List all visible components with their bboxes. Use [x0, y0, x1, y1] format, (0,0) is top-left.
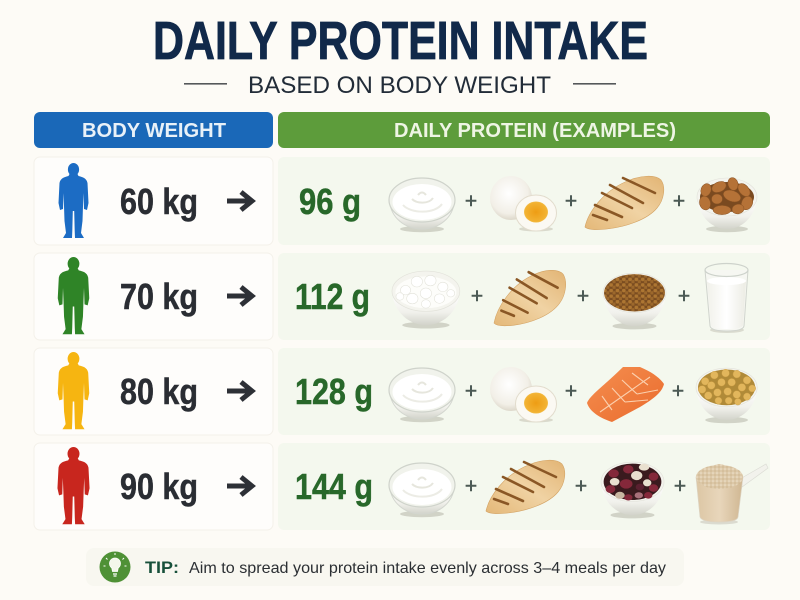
- body weight card 90 kg: 90 kg: [120, 466, 198, 507]
- protein card 128 g: [278, 348, 770, 435]
- protein card 144 g: +: [674, 475, 686, 498]
- row: 90 kg: [34, 443, 770, 530]
- icon: almonds: [697, 176, 757, 232]
- body weight card 80 kg: 80 kg: [120, 371, 198, 412]
- protein card 128 g: 128 g: [295, 371, 373, 412]
- icon: mixed beans: [601, 462, 664, 518]
- tip bar: [86, 548, 684, 586]
- icon: glass of milk: [705, 264, 748, 333]
- icon: protein powder scoop: [696, 464, 768, 524]
- body weight card 60 kg: 60 kg: [120, 181, 198, 222]
- body weight card 90 kg: [34, 443, 273, 530]
- header: daily protein: DAILY PROTEIN (EXAMPLES): [394, 119, 676, 142]
- title: DAILY PROTEIN INTAKE: [153, 11, 648, 71]
- body weight card 60 kg: [34, 157, 273, 245]
- protein card 96 g: +: [673, 190, 685, 213]
- protein card 112 g: +: [678, 285, 690, 308]
- icon: chickpeas: [696, 368, 757, 423]
- header: daily protein: [278, 112, 770, 148]
- body weight card 70 kg: 70 kg: [120, 276, 198, 317]
- row: 80 kg: [34, 348, 770, 435]
- protein card 144 g: +: [465, 475, 477, 498]
- protein card 96 g: 96 g: [299, 181, 361, 222]
- protein card 96 g: [278, 157, 770, 245]
- icon: light bulb: [100, 552, 130, 582]
- protein card 112 g: [278, 253, 770, 340]
- protein card 112 g: 112 g: [295, 276, 370, 317]
- body weight card 70 kg: [34, 253, 273, 340]
- header: body weight: [34, 112, 273, 148]
- protein card 128 g: +: [672, 380, 684, 403]
- icon: cottage cheese: [392, 271, 460, 329]
- header: body weight: BODY WEIGHT: [82, 119, 226, 142]
- tip label: TIP:: [145, 558, 179, 577]
- protein card 144 g: +: [575, 475, 587, 498]
- protein card 144 g: 144 g: [295, 466, 373, 507]
- row: 60 kg: [34, 157, 770, 245]
- subtitle: BASED ON BODY WEIGHT: [248, 72, 551, 99]
- protein card 96 g: +: [465, 190, 477, 213]
- protein card 112 g: +: [577, 285, 589, 308]
- protein card 128 g: +: [565, 380, 577, 403]
- icon: salmon: [587, 367, 664, 422]
- protein card 96 g: +: [565, 190, 577, 213]
- protein card 144 g: [278, 443, 770, 530]
- protein card 128 g: +: [465, 380, 477, 403]
- protein card 112 g: +: [471, 285, 483, 308]
- tip text: Aim to spread your protein intake evenly across 3–4 meals per day: [189, 560, 666, 577]
- body weight card 80 kg: [34, 348, 273, 435]
- row: 70 kg: [34, 253, 770, 340]
- icon: lentils: [603, 273, 666, 329]
